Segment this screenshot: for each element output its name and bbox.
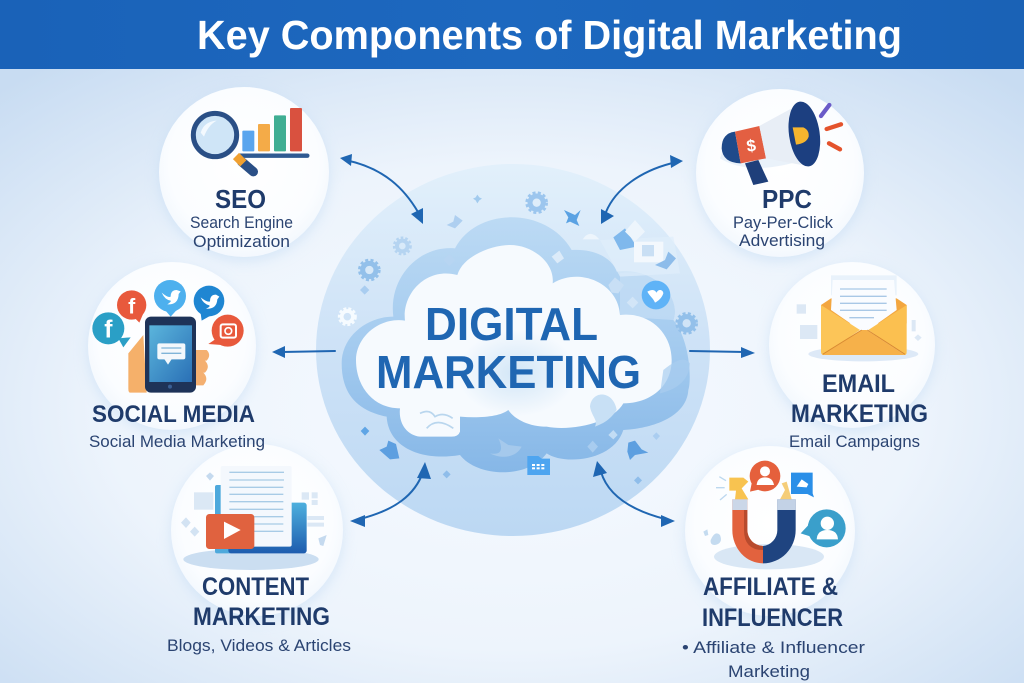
arrow: PPC [601, 155, 683, 224]
panel: Affiliate and Influencer [682, 446, 866, 681]
panel: PPC [696, 89, 864, 261]
central hub: digital marketing cloud [316, 164, 710, 536]
icon: document and video [181, 466, 327, 570]
heart badge [642, 281, 670, 309]
blobs [379, 441, 399, 459]
SEO description: Optimization [193, 233, 290, 251]
Affiliate description: Marketing [728, 663, 810, 681]
Social Media label: SOCIAL MEDIA [92, 401, 255, 428]
panel: Social Media [88, 262, 265, 451]
Affiliate description: • Affiliate & Influencer [682, 639, 866, 657]
SEO label: SEO [215, 184, 266, 214]
arrow: Content [350, 462, 431, 527]
sparkles [564, 210, 581, 226]
icon: magnet with people [703, 461, 846, 569]
Affiliate description [682, 639, 866, 681]
icon: envelope [797, 275, 922, 361]
hub circle [316, 164, 710, 536]
Email Marketing label: MARKETING [791, 400, 928, 428]
white cloud [356, 245, 672, 437]
title: Key Components of Digital Marketing [197, 12, 902, 58]
cloud doodle [420, 411, 453, 428]
folder icon [527, 456, 550, 475]
Affiliate label: INFLUENCER [702, 604, 843, 632]
arrows [272, 154, 755, 527]
icon: phone with social bubbles [92, 280, 244, 393]
Email Marketing description: Email Campaigns [789, 433, 920, 451]
arrow: Affiliate [593, 461, 675, 527]
header banner [0, 0, 1024, 69]
arrow: Social Media [272, 346, 335, 358]
PPC description [733, 214, 834, 250]
Affiliate label [702, 573, 843, 632]
cloud illustration [339, 193, 697, 484]
panel: SEO [159, 87, 329, 261]
PPC description: Advertising [739, 232, 825, 250]
icon: phone with social bubbles: f [104, 316, 113, 343]
hub label: MARKETING [376, 346, 641, 398]
hub label [376, 298, 641, 398]
top right shapes [613, 228, 637, 250]
arrow: SEO [340, 154, 423, 224]
Content Marketing label [193, 573, 330, 631]
panel: Content Marketing [167, 444, 351, 655]
Social Media description: Social Media Marketing [89, 433, 265, 451]
SEO description [190, 214, 293, 251]
hub label: DIGITAL [425, 298, 598, 350]
icon: megaphone: $ [745, 136, 758, 156]
icon: megaphone [720, 100, 841, 185]
gears [530, 196, 543, 209]
icon: phone with social bubbles: f [128, 294, 136, 318]
Content Marketing label: CONTENT [202, 573, 309, 601]
Content Marketing description: Blogs, Videos & Articles [167, 637, 351, 655]
Email Marketing label: EMAIL [822, 370, 895, 398]
PPC description: Pay-Per-Click [733, 214, 834, 232]
arrow: Email [690, 347, 755, 358]
SEO description: Search Engine [190, 214, 293, 232]
Affiliate label: AFFILIATE & [703, 573, 838, 601]
icon: magnifier and bars [193, 108, 307, 172]
panel: Email Marketing [769, 262, 935, 451]
Content Marketing label: MARKETING [193, 603, 330, 631]
speech tail [590, 395, 617, 427]
PPC label: PPC [762, 184, 812, 214]
Email Marketing label [791, 370, 928, 428]
